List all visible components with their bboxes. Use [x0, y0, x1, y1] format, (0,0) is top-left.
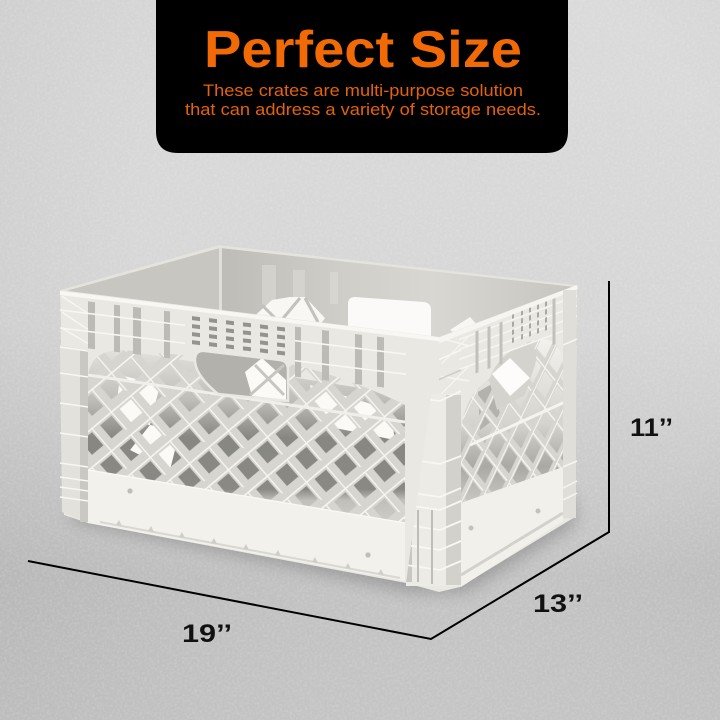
label: 19 inch width: 19’’	[182, 620, 232, 648]
front corner post	[406, 340, 461, 586]
text block: description: These crates are multi-purpose solution	[203, 82, 523, 100]
front lower panel	[88, 470, 405, 581]
crate side face	[406, 285, 578, 592]
panel: header	[156, 0, 568, 153]
crate shadow	[70, 495, 575, 592]
front handle	[195, 351, 288, 401]
handle opening in back wall	[348, 297, 431, 340]
label: 13 inch depth: 13’’	[533, 590, 583, 618]
side lower panel	[461, 467, 563, 587]
side window lattice	[461, 340, 563, 502]
dimension lines	[28, 281, 609, 639]
side band grid	[441, 288, 577, 394]
heading: Perfect Size: Perfect Size	[204, 21, 522, 79]
crate front face	[60, 290, 439, 583]
label: 11 inch height: 11’’	[630, 414, 673, 442]
lattice seen through back wall	[250, 297, 325, 332]
front window lattice	[88, 350, 405, 522]
crate interior	[60, 245, 577, 345]
front top band grid	[60, 293, 439, 394]
front left post	[60, 345, 88, 523]
side right post	[563, 290, 577, 518]
text block: description	[185, 82, 541, 119]
crate illustration	[60, 245, 578, 592]
text block: description: that can address a variety of storage needs.	[185, 101, 541, 119]
